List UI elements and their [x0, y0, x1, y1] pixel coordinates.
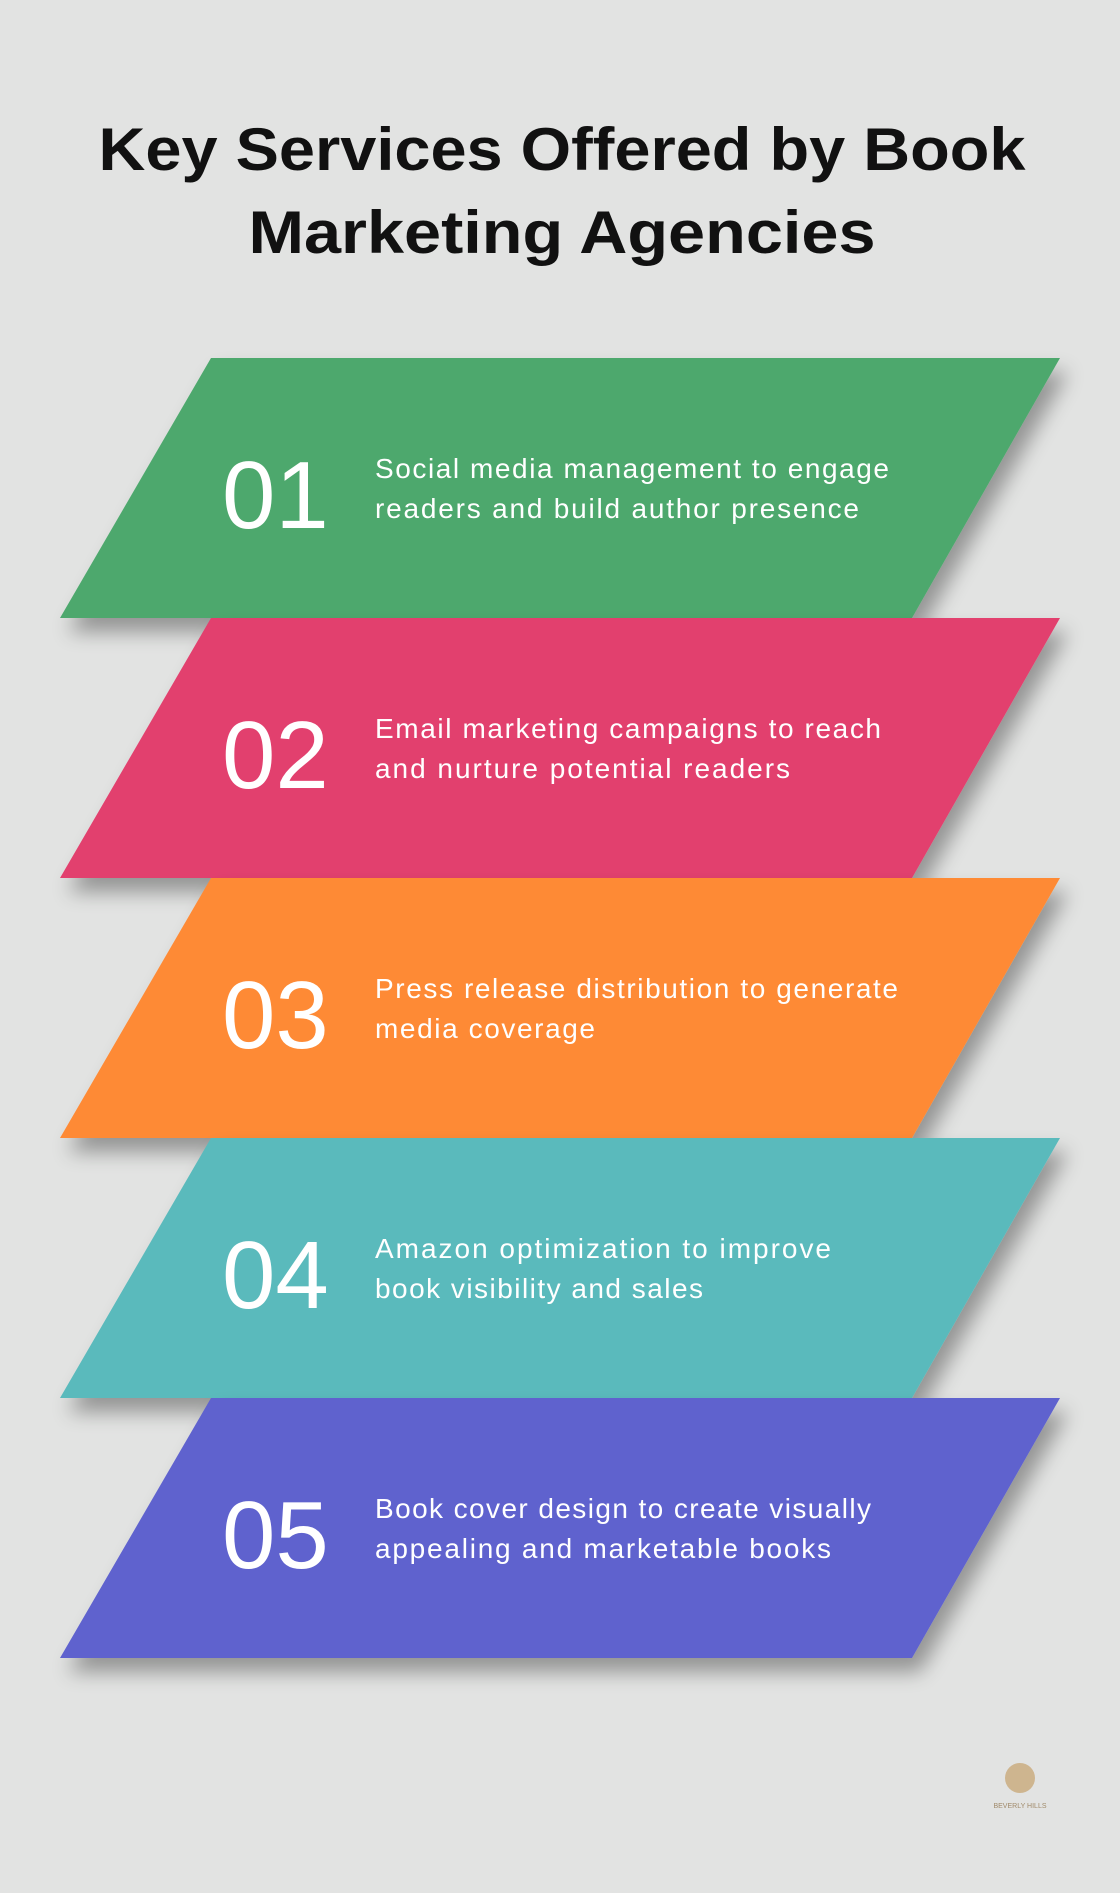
panel: 04 amazon	[60, 1138, 1060, 1398]
panel: 01 social media: Social media management to engage	[375, 453, 889, 484]
panel: 02 email: 02	[222, 702, 329, 809]
logo: BEVERLY HILLS	[993, 1803, 1047, 1810]
panel: 05 cover: appealing and marketable books	[375, 1533, 831, 1564]
panel: 04 amazon: 04	[222, 1222, 329, 1329]
panel: 04 amazon: book visibility and sales	[375, 1273, 703, 1304]
panel: 03 press: 03	[222, 962, 329, 1069]
panel: 03 press	[60, 878, 1060, 1138]
panel: 01 social media	[60, 358, 1060, 618]
logo	[993, 1763, 1047, 1810]
title: Marketing Agencies	[248, 199, 876, 266]
panel: 05 cover	[60, 1398, 1060, 1658]
title	[98, 116, 1026, 266]
panel: 03 press: media coverage	[375, 1013, 595, 1044]
panel: 05 cover: 05	[222, 1482, 329, 1589]
panel: 03 press: Press release distribution to generate	[375, 973, 898, 1004]
panel: 02 email: Email marketing campaigns to reach	[375, 713, 881, 744]
panel: 05 cover: Book cover design to create visually	[375, 1493, 871, 1524]
panel: 02 email	[60, 618, 1060, 878]
panel: 02 email: and nurture potential readers	[375, 753, 790, 784]
panel: 01 social media: 01	[222, 442, 329, 549]
title: Key Services Offered by Book	[98, 116, 1026, 183]
panel: 01 social media: readers and build author presence	[375, 493, 859, 524]
panel: 04 amazon: Amazon optimization to improve	[375, 1233, 831, 1264]
